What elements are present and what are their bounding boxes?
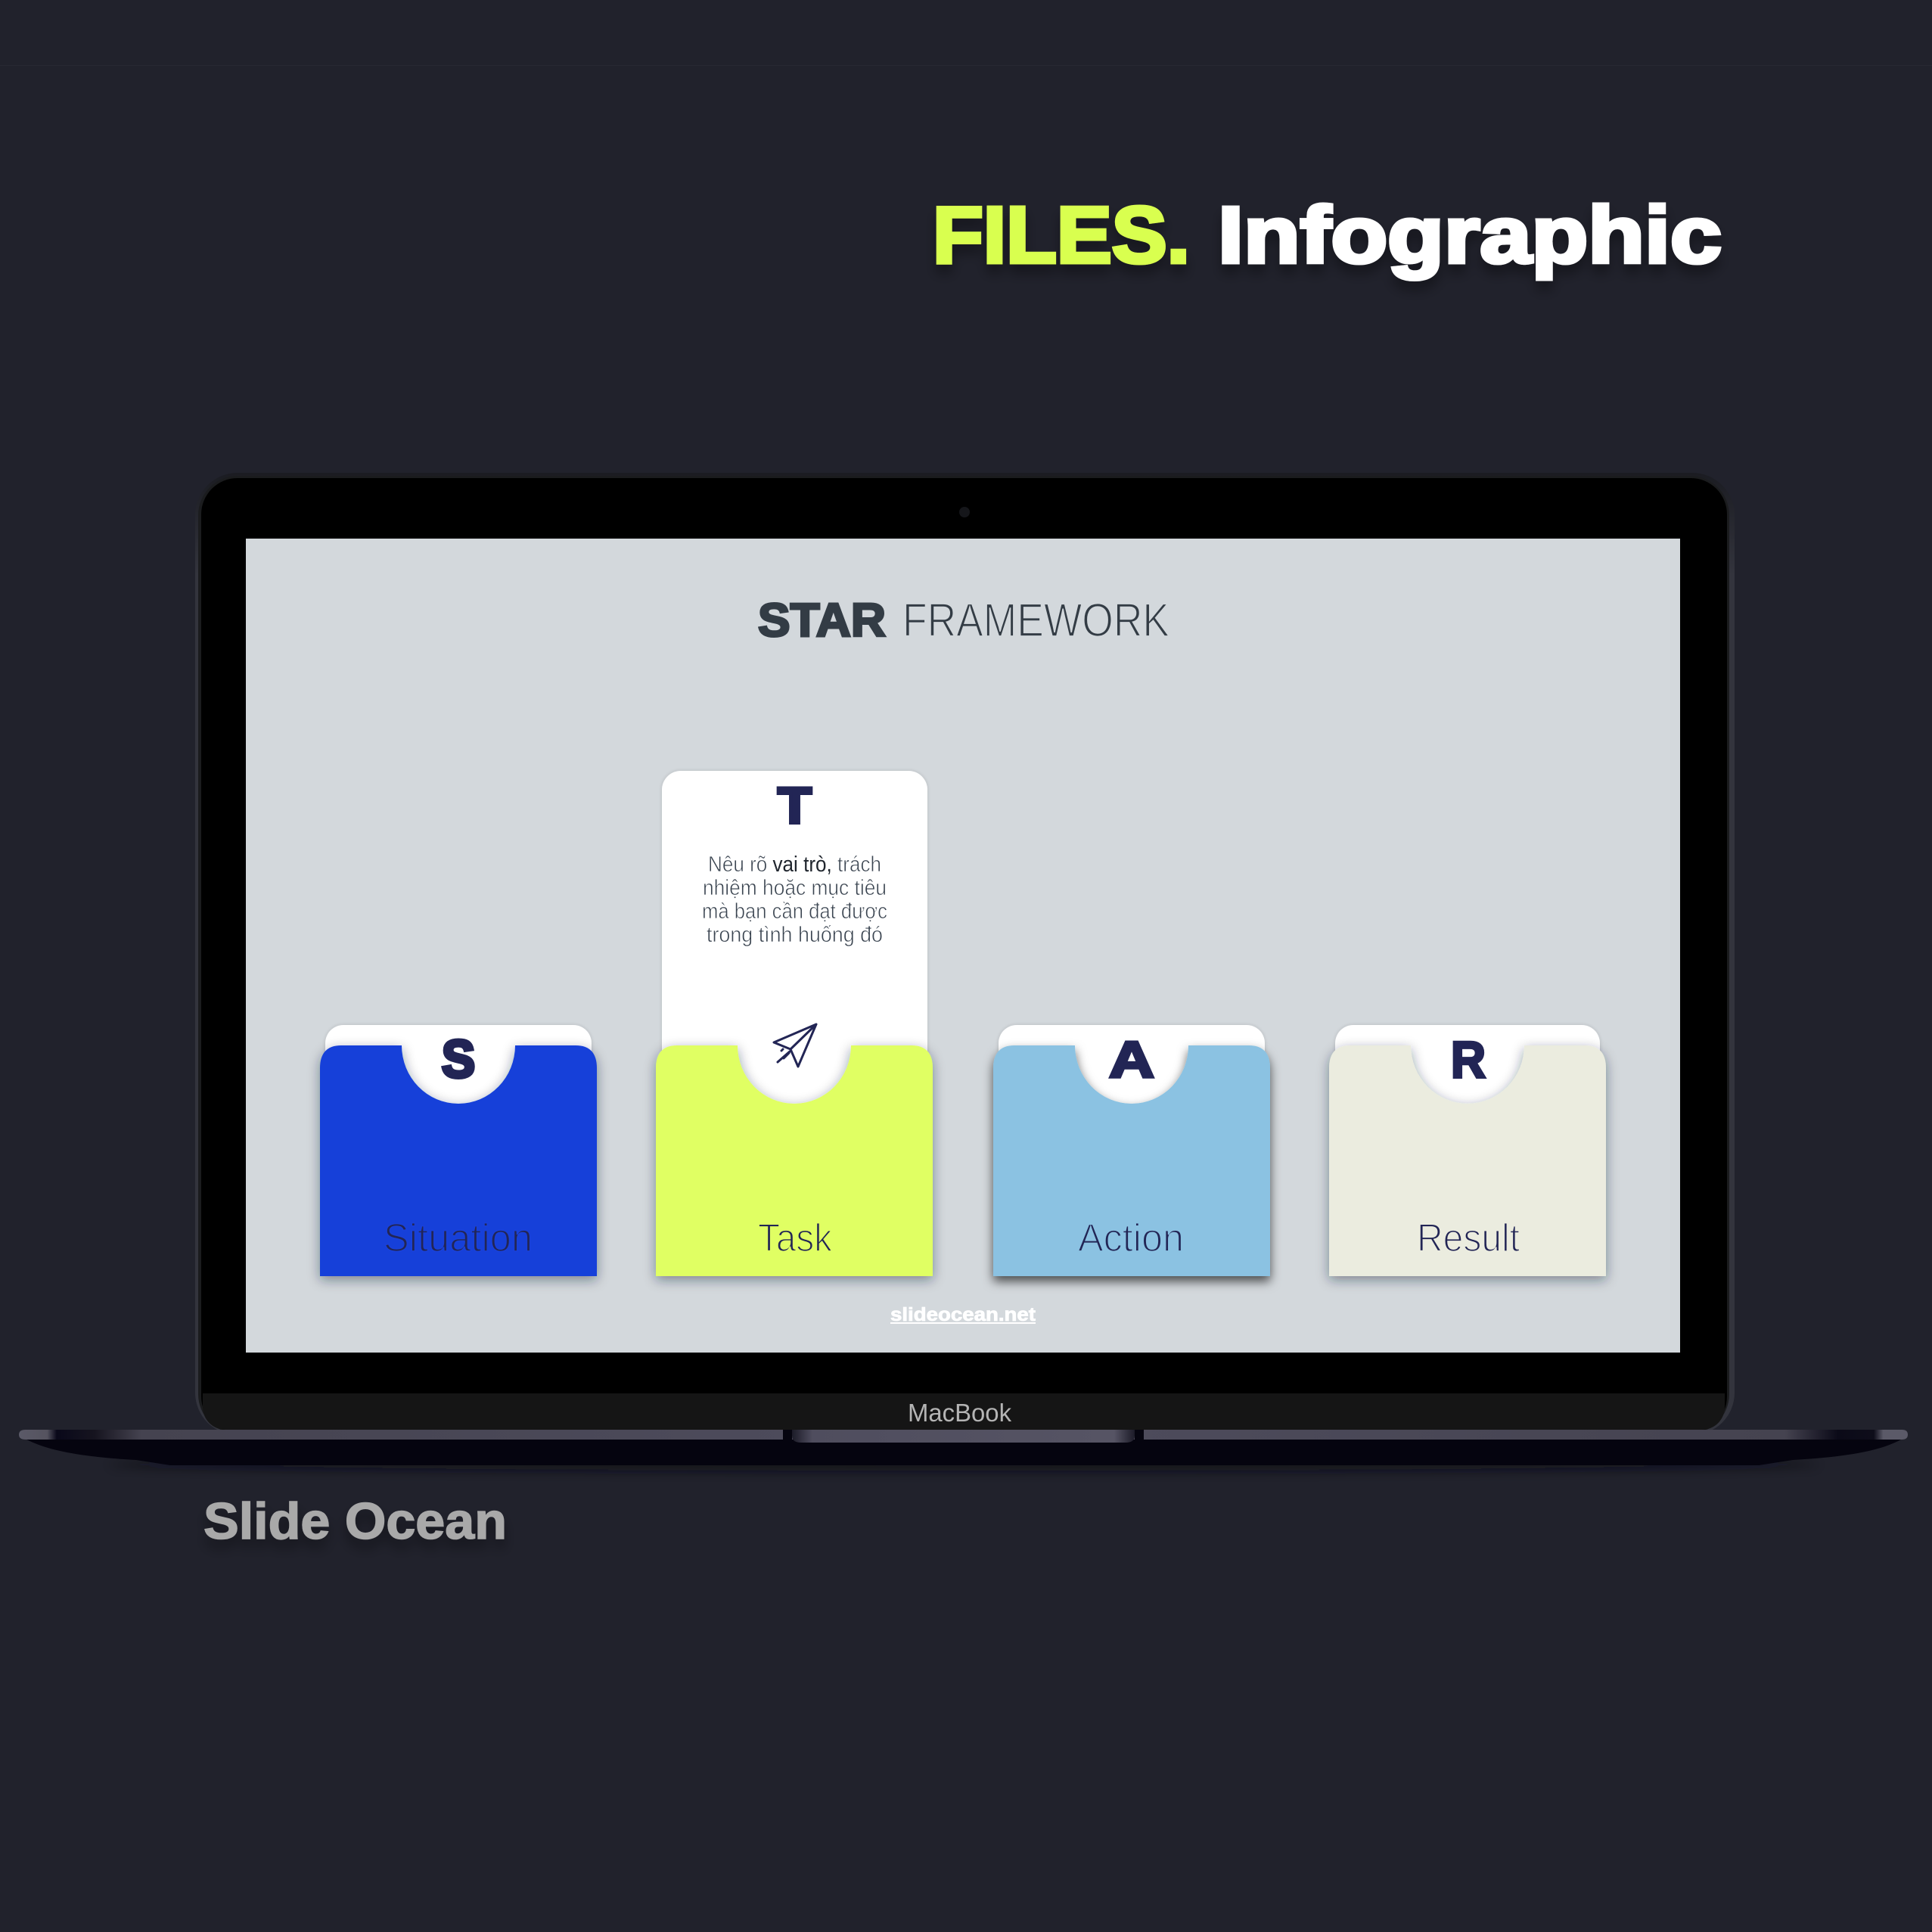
letter S: S [442, 1030, 475, 1089]
description: Nêu rõ vai trò, trách [708, 853, 881, 877]
white tab [325, 1025, 592, 1138]
MacBook label: MacBook [908, 1399, 1011, 1427]
description: nhiệm hoặc mục tiêu [703, 876, 887, 900]
label: Task [758, 1216, 833, 1260]
cream pocket [1329, 1045, 1606, 1276]
lime pocket [656, 1045, 933, 1276]
description: trong tình huống đó [707, 923, 883, 947]
webcam [959, 507, 970, 517]
footer brand: Slide Ocean [203, 1492, 507, 1550]
slide heading: FRAMEWORK [902, 595, 1169, 647]
letter T: T [778, 777, 812, 834]
description [702, 853, 887, 947]
website link: slideocean.net [890, 1304, 1036, 1325]
label: Action [1078, 1216, 1184, 1260]
light blue pocket [993, 1045, 1270, 1276]
slide heading: STAR [758, 595, 886, 647]
white card [662, 771, 927, 1149]
icon: paper plane [774, 1024, 816, 1067]
slide heading [758, 595, 1169, 647]
blue pocket [320, 1045, 597, 1276]
laptop chin [203, 1393, 1725, 1430]
slide screen [246, 539, 1680, 1353]
letter R: R [1451, 1031, 1486, 1089]
laptop base [19, 1430, 1908, 1471]
title: FILES. [933, 191, 1190, 280]
description: mà bạn cần đạt được [702, 899, 887, 924]
title: Infographic [1218, 191, 1722, 280]
card: Task [656, 771, 933, 1276]
laptop lid [195, 473, 1735, 1435]
card: Situation [320, 1025, 597, 1276]
label: Situation [384, 1216, 533, 1260]
letter A: A [1109, 1031, 1154, 1089]
laptop mockup [19, 473, 1908, 1471]
card: Action [993, 1025, 1270, 1276]
card: Result [1329, 1025, 1606, 1276]
title [933, 191, 1722, 280]
white tab [999, 1025, 1265, 1138]
white tab [1335, 1025, 1600, 1138]
label: Result [1417, 1216, 1520, 1260]
